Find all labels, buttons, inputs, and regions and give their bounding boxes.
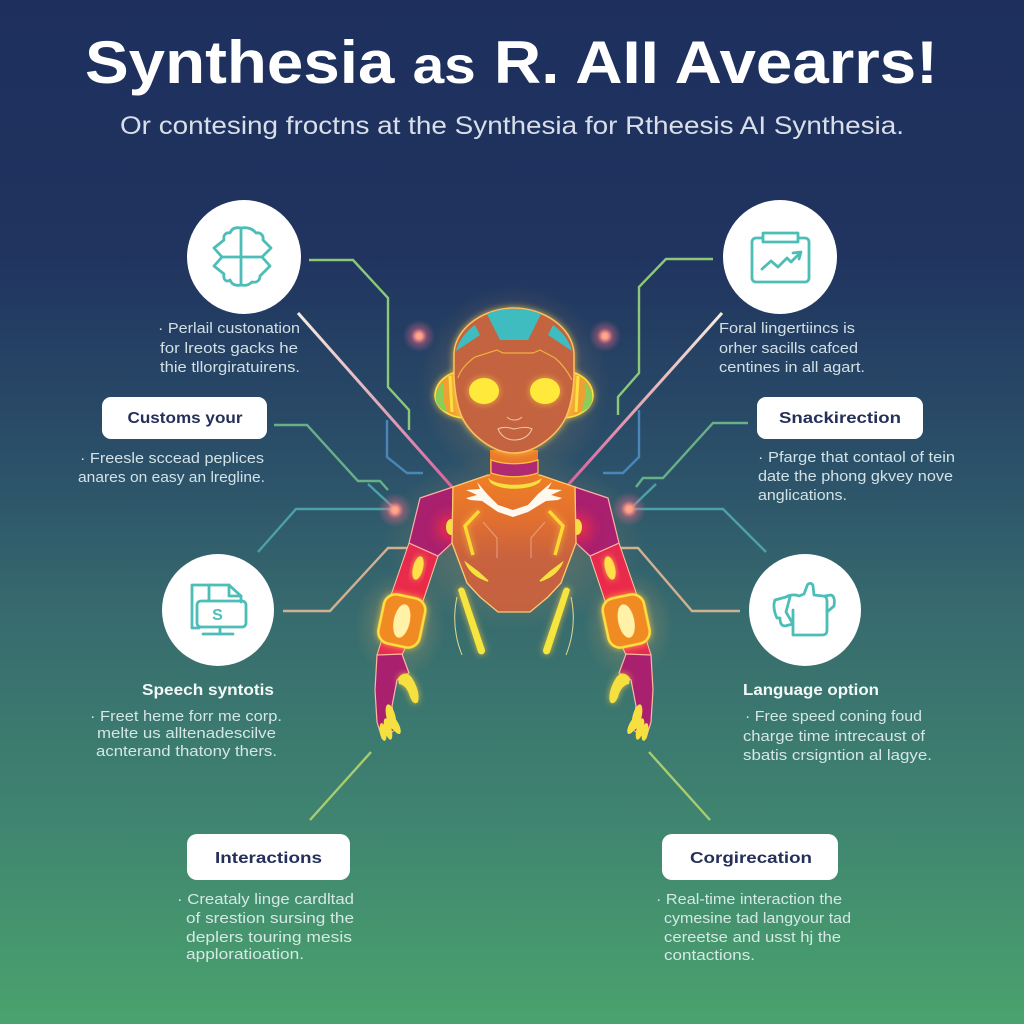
text block: contactions.: [664, 947, 755, 964]
connector: top right pink: [568, 313, 722, 485]
shoulder: [409, 487, 453, 556]
text block: thie tllorgiratuirens.: [160, 359, 300, 376]
arm light: [410, 555, 426, 581]
text block: cymesine tad langyour tad: [664, 910, 851, 927]
subtitle: Or contesing froctns at the Synthesia for Rtheesis AI Synthesia.: [120, 112, 904, 140]
text block: · Freet heme forr me corp.: [90, 708, 282, 725]
panel: speech synthesis: [90, 554, 282, 760]
right arm: [565, 487, 653, 741]
neck: [490, 450, 538, 487]
text block: anares on easy an lregline.: [78, 469, 265, 486]
text block: melte us alltenadescilve: [97, 725, 276, 742]
text block: [758, 449, 955, 504]
text block: for lreots gacks he: [160, 340, 298, 357]
text block: [177, 891, 354, 963]
text block: orher sacills cafced: [719, 340, 858, 357]
eye left: [469, 378, 499, 404]
text block: deplers touring mesis: [186, 929, 352, 946]
neck band: [491, 460, 538, 477]
label pill: [757, 397, 923, 439]
text block: · Creataly linge cardltad: [177, 891, 354, 908]
connector: right blue: [630, 484, 766, 552]
fingers: [378, 703, 403, 741]
connector: left blue: [258, 484, 395, 552]
panel: interactions: [177, 834, 354, 963]
text block: Foral lingertiincs is: [719, 320, 855, 337]
glowing node: shoulder right: [612, 492, 646, 526]
connector lines: [258, 259, 766, 820]
text block: [158, 320, 300, 376]
collar band: [488, 478, 542, 489]
connector: bottom right: [649, 752, 710, 820]
icon: document screen: S: [212, 607, 223, 624]
connector: right green: [636, 423, 748, 487]
face inner outline: [458, 350, 572, 380]
text block: [656, 891, 851, 964]
text block: · Real-time interaction the: [656, 891, 842, 908]
icon: document screen: [162, 554, 274, 666]
text block: date the phong gkvey nove: [758, 468, 953, 485]
connector: right tan: [618, 548, 740, 611]
robot halo: [355, 285, 673, 680]
panel: top left feature: [158, 200, 301, 376]
text block: · Freesle sccead peplices: [80, 450, 264, 467]
panel: top right feature: [719, 200, 865, 376]
text block: [743, 708, 932, 764]
mouth: [498, 427, 532, 440]
chest lines right: [531, 511, 563, 581]
connector: left tan: [283, 548, 412, 611]
connector: top right green: [618, 259, 713, 415]
title: Synthesia as R. AII Avearrs!: [85, 29, 938, 96]
shoulder light: [437, 515, 463, 541]
glowing node: shoulder left: [378, 493, 412, 527]
panel: customs your: [78, 397, 267, 486]
panel: snackirection: [757, 397, 955, 504]
text block: · Free speed coning foud: [745, 708, 922, 725]
connector: top left pink: [298, 313, 452, 487]
text block: of srestion sursing the: [186, 910, 354, 927]
label pill: [102, 397, 267, 439]
label pill: Customs your: [128, 410, 242, 427]
glowing node: head right: [589, 320, 621, 352]
glowing node: head left: [403, 320, 435, 352]
text block: [90, 708, 282, 760]
text block: [719, 320, 865, 376]
text block: · Perlail custonation: [158, 320, 300, 337]
icon: chart clipboard: [723, 200, 837, 314]
cap left: [456, 325, 480, 351]
text block: acnterand thatony thers.: [96, 743, 277, 760]
connector: left green: [274, 425, 388, 490]
text block: cereetse and usst hj the: [664, 929, 841, 946]
chest lines left: [465, 511, 497, 581]
connector: bottom left: [310, 752, 371, 820]
forearm: [377, 636, 407, 655]
heading: Speech syntotis: [142, 682, 274, 699]
text block: [78, 450, 265, 486]
connector: top right blue: [603, 410, 639, 473]
label pill: Interactions: [215, 850, 322, 867]
label pill: [187, 834, 350, 880]
lower body bars right: [543, 587, 573, 655]
head: [454, 308, 574, 453]
torso: [452, 475, 576, 612]
cap right: [548, 325, 572, 351]
heading: Language option: [743, 682, 879, 699]
text block: sbatis crsigntion al lagye.: [743, 747, 932, 764]
nose: [507, 417, 522, 420]
chest necklace: [466, 482, 562, 517]
label pill: [662, 834, 838, 880]
robot figure: [355, 285, 673, 741]
face: [454, 308, 574, 453]
upper arm: [388, 543, 438, 604]
connector: top left green: [309, 260, 409, 430]
icon: brain: [187, 200, 301, 314]
ear left: [435, 372, 464, 418]
left arm: [375, 487, 463, 741]
text block: charge time intrecaust of: [743, 728, 926, 745]
text block: anglications.: [758, 487, 847, 504]
thumb: [398, 674, 419, 703]
text block: apploratioation.: [186, 946, 304, 963]
lower body bars left: [455, 587, 485, 655]
panel: language option: [743, 554, 932, 764]
cap centre: [487, 309, 541, 340]
panel: corgirecation: [656, 834, 851, 964]
label pill: Corgirecation: [690, 850, 812, 867]
text block: centines in all agart.: [719, 359, 865, 376]
text block: · Pfarge that contaol of tein: [758, 449, 955, 466]
icon: thumbs up: [749, 554, 861, 666]
hand: [375, 654, 409, 738]
eye right: [530, 378, 560, 404]
label pill: Snackirection: [779, 410, 901, 427]
ear right: [564, 372, 593, 418]
bracer: [376, 592, 428, 650]
connector: top left blue: [387, 420, 423, 473]
